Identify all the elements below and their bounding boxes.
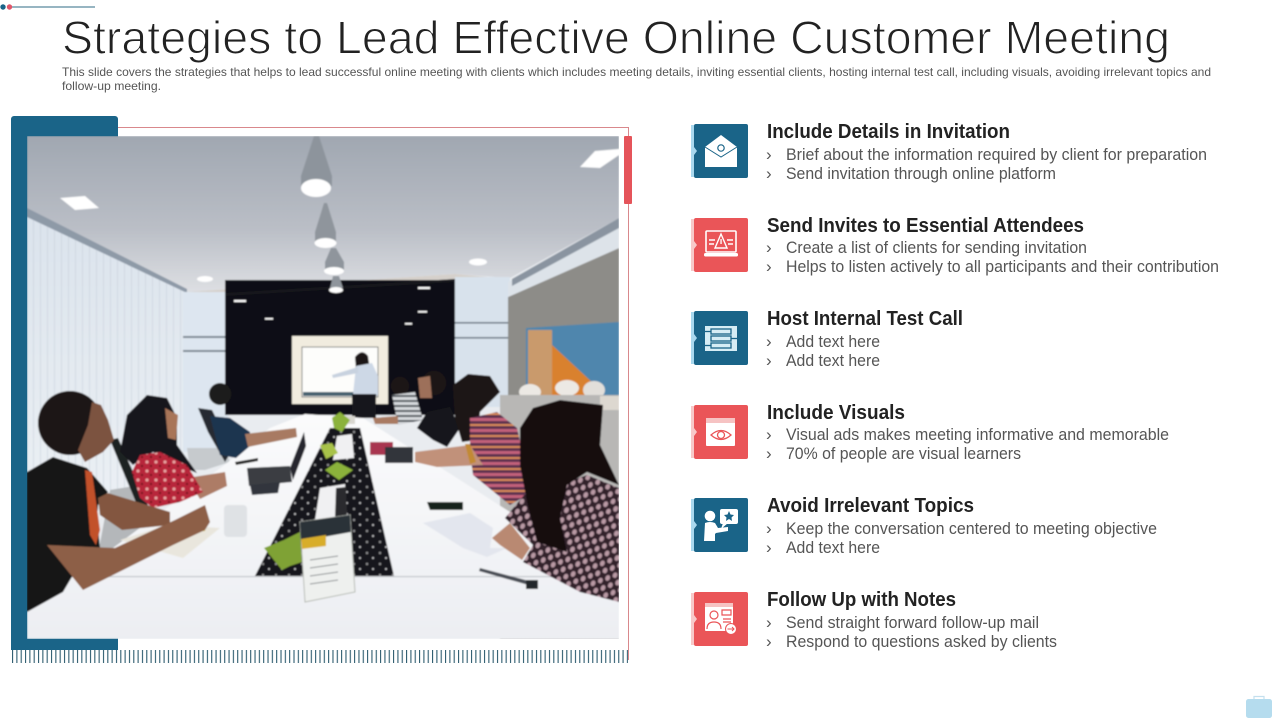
item 1: include details in invitation: › bbox=[766, 145, 772, 164]
title: Strategies to Lead Effective Online Customer Meeting bbox=[62, 12, 1170, 64]
man black shirt bbox=[38, 391, 102, 455]
item 5: avoid irrelevant topics: Avoid Irrelevant Topics bbox=[767, 495, 974, 517]
item 3: host internal test call bbox=[691, 308, 963, 370]
item 6: follow up with notes: › bbox=[766, 632, 772, 651]
icon: envelope bbox=[691, 124, 748, 178]
item 6: follow up with notes: Send straight forward follow-up mail bbox=[786, 614, 1039, 632]
item 3: host internal test call: Add text here bbox=[786, 333, 880, 351]
item 6: follow up with notes: › bbox=[766, 613, 772, 632]
icon: speaker with star bubble bbox=[691, 498, 748, 552]
plants bbox=[264, 412, 353, 570]
red accent bar bbox=[624, 136, 632, 204]
item 5: avoid irrelevant topics: Add text here bbox=[786, 539, 880, 557]
item 6: follow up with notes bbox=[691, 589, 1057, 651]
lamps bbox=[301, 136, 332, 186]
people on right bbox=[391, 377, 409, 395]
woman red top bbox=[110, 438, 150, 512]
item 3: host internal test call: Add text here bbox=[786, 352, 880, 370]
item 3: host internal test call: › bbox=[766, 332, 772, 351]
item 5: avoid irrelevant topics: › bbox=[766, 538, 772, 557]
item 2: send invites to essential attendees: › bbox=[766, 238, 772, 257]
lights bbox=[60, 196, 99, 210]
screen and presenter bbox=[292, 336, 388, 404]
item 4: include visuals: › bbox=[766, 425, 772, 444]
item 4: include visuals: Include Visuals bbox=[767, 402, 905, 424]
icon: profile window with arrow bbox=[691, 592, 748, 646]
table sign bbox=[300, 515, 355, 602]
panel: strategy list bbox=[691, 121, 1219, 651]
item 4: include visuals: Visual ads makes meeting informative and memorable bbox=[786, 426, 1169, 444]
panel: photo frame bbox=[11, 116, 632, 663]
item 5: avoid irrelevant topics: Keep the conversation centered to meeting objective bbox=[786, 520, 1157, 538]
item 1: include details in invitation: › bbox=[766, 164, 772, 183]
icon: eye window bbox=[691, 405, 748, 459]
item 1: include details in invitation bbox=[691, 121, 1207, 183]
item 2: send invites to essential attendees: › bbox=[766, 257, 772, 276]
frame outline bbox=[118, 128, 628, 660]
item 5: avoid irrelevant topics bbox=[691, 495, 1157, 557]
item 4: include visuals bbox=[691, 402, 1169, 463]
center pebble strip bbox=[255, 428, 394, 576]
item 3: host internal test call: Host Internal Test Call bbox=[767, 308, 963, 330]
subtitle text block bbox=[62, 65, 1211, 93]
item 2: send invites to essential attendees: Helps to listen actively to all participants and their contribution bbox=[786, 258, 1219, 276]
item 2: send invites to essential attendees bbox=[691, 215, 1219, 276]
right woman bbox=[505, 475, 619, 602]
table bbox=[113, 412, 619, 639]
photo: meeting room bbox=[27, 136, 619, 640]
icon: laptop warning bbox=[691, 218, 748, 272]
subtitle text block: This slide covers the strategies that helps to lead successful online meeting with clients which includes meeting details, inviting essential clients, hosting internal test call, including visuals, avoiding irrelevant topics and bbox=[62, 65, 1211, 79]
item 2: send invites to essential attendees: Send Invites to Essential Attendees bbox=[767, 215, 1084, 237]
item 4: include visuals: › bbox=[766, 444, 772, 463]
item 2: send invites to essential attendees: Create a list of clients for sending invitation bbox=[786, 239, 1087, 257]
top corner decoration bbox=[0, 4, 95, 10]
item 1: include details in invitation: Include Details in Invitation bbox=[767, 121, 1010, 143]
item 6: follow up with notes: Respond to questions asked by clients bbox=[786, 633, 1057, 651]
blue backing block bbox=[11, 116, 118, 650]
table items bbox=[224, 505, 247, 537]
item 3: host internal test call: › bbox=[766, 351, 772, 370]
man navy shirt bbox=[198, 408, 232, 462]
tick strip bbox=[12, 650, 628, 663]
icon: briefcase bbox=[1246, 696, 1272, 718]
item 4: include visuals: 70% of people are visual learners bbox=[786, 445, 1021, 463]
subtitle text block: follow-up meeting. bbox=[62, 79, 161, 93]
item 6: follow up with notes: Follow Up with Notes bbox=[767, 589, 956, 611]
item 1: include details in invitation: Send invitation through online platform bbox=[786, 165, 1056, 183]
item 5: avoid irrelevant topics: › bbox=[766, 519, 772, 538]
icon: server table bbox=[691, 311, 748, 365]
item 1: include details in invitation: Brief about the information required by client for preparation bbox=[786, 146, 1207, 164]
